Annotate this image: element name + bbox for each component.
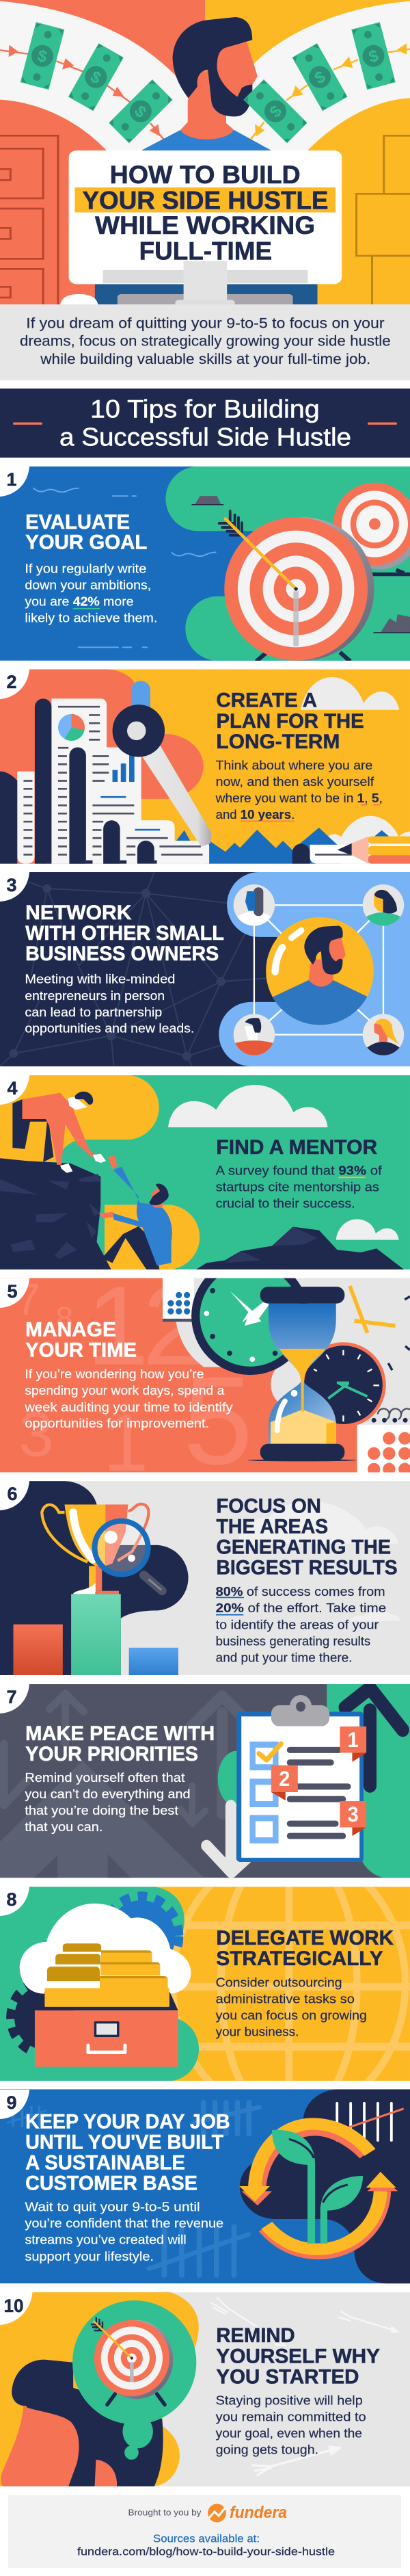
body text: to identify the areas of your xyxy=(216,1617,379,1631)
body text: startups cite mentorship as xyxy=(216,1179,379,1194)
number badge 10: 10 xyxy=(4,2296,23,2316)
body text: now, and then ask yourself xyxy=(216,774,374,789)
number badge 1 xyxy=(0,466,29,497)
green background xyxy=(0,1887,199,2081)
bill 5 xyxy=(292,43,347,111)
heading xyxy=(25,511,147,553)
number badge 3 xyxy=(0,872,29,902)
body text: If you’re wondering how you’re xyxy=(25,1367,204,1381)
heading: BUSINESS OWNERS xyxy=(25,943,219,965)
body text xyxy=(25,562,157,625)
waves and dashes xyxy=(33,488,216,647)
fundera wordmark: fundera xyxy=(230,2503,287,2522)
number badge 8: 8 xyxy=(6,1889,17,1910)
faint numbers: 1 xyxy=(103,1398,148,1488)
body text: Think about where you are xyxy=(216,758,372,772)
gears xyxy=(10,1896,179,2053)
right shelves xyxy=(357,135,410,306)
bill 4: $ xyxy=(266,102,286,122)
panel 10: remind yourself why you started xyxy=(0,2292,410,2486)
drawer xyxy=(35,2010,178,2067)
number badge 4 xyxy=(0,1075,29,1105)
section heading band: a Successful Side Hustle xyxy=(59,423,351,451)
climber top xyxy=(12,1092,106,1173)
heading: UNTIL YOU'VE BUILT xyxy=(25,2131,224,2153)
body text: can lead to partnership xyxy=(25,1005,162,1019)
body text: you are 42% more xyxy=(25,594,134,608)
heading: REMIND xyxy=(216,2324,295,2347)
faint clouds xyxy=(236,1501,400,1621)
number badge 4: 4 xyxy=(7,1078,18,1099)
calendar bottom xyxy=(357,1408,410,1475)
ribbon 2: 2 xyxy=(279,1767,290,1791)
number badge 2 xyxy=(0,669,29,699)
avatar top right xyxy=(363,884,404,928)
mountain xyxy=(196,1227,404,1270)
heading: STRATEGICALLY xyxy=(216,1947,383,1970)
faint numbers: 8 xyxy=(56,1300,73,1336)
body text: where you want to be in 1, 5, xyxy=(215,791,383,805)
body text xyxy=(216,1584,386,1664)
number badge 1: 1 xyxy=(6,469,17,490)
body text: 80% of success comes from xyxy=(216,1584,385,1599)
intro text panel: dreams, focus on strategically growing your side hustle xyxy=(20,334,391,350)
icon: fundera logo xyxy=(208,2503,226,2523)
ribbon 2 xyxy=(271,1765,298,1800)
number badge 5: 5 xyxy=(7,1281,18,1302)
number badge 9 xyxy=(0,2090,29,2119)
grey down arrow xyxy=(206,1806,259,1872)
panel 5: manage your time xyxy=(0,1278,410,1472)
body text: Remind yourself often that xyxy=(25,1770,185,1785)
heading: THE AREAS xyxy=(216,1516,328,1538)
heading: GENERATING THE xyxy=(216,1536,391,1558)
intro text panel: If you dream of quitting your 9-to-5 to focus on your xyxy=(26,315,385,331)
hourglass xyxy=(247,1287,357,1461)
heading xyxy=(216,1927,394,1970)
compass xyxy=(113,681,211,847)
connecting lines xyxy=(254,905,383,1035)
file folders xyxy=(44,1943,178,2010)
title: HOW TO BUILD xyxy=(110,161,301,189)
section heading band: 10 Tips for Building xyxy=(90,395,320,423)
heading: KEEP YOUR DAY JOB xyxy=(25,2110,230,2133)
bill 3 xyxy=(109,79,173,143)
number badge 9: 9 xyxy=(6,2092,17,2113)
coral arrows xyxy=(0,45,163,139)
heading xyxy=(25,2110,230,2194)
number badge 3: 3 xyxy=(6,875,17,895)
body text xyxy=(25,972,194,1036)
panel 1: evaluate your goal xyxy=(0,466,410,661)
person xyxy=(141,17,271,150)
heading xyxy=(25,902,224,965)
mountains xyxy=(176,830,190,841)
ribbon 3 xyxy=(340,1801,366,1836)
panel 2: create a plan xyxy=(0,669,410,873)
body text: business generating results xyxy=(216,1633,370,1648)
heading: EVALUATE xyxy=(25,511,130,534)
heading xyxy=(216,2324,380,2389)
heading: DELEGATE WORK xyxy=(216,1927,394,1949)
avatar bottom right xyxy=(363,1014,404,1059)
section heading band xyxy=(0,389,410,458)
circular arrows xyxy=(255,2124,384,2253)
number badge 7: 7 xyxy=(6,1687,17,1707)
number badge 5 xyxy=(0,1278,29,1308)
plant xyxy=(272,2130,363,2244)
document towers xyxy=(0,698,209,873)
body text: you’re confident that the revenue xyxy=(25,2217,223,2231)
small target xyxy=(91,2317,173,2405)
climber bottom xyxy=(99,1155,172,1270)
body text: entrepreneurs in person xyxy=(25,988,165,1003)
number badge 7 xyxy=(0,1684,29,1713)
dark clock xyxy=(301,1342,386,1428)
clouds xyxy=(301,677,399,710)
heading: PLAN FOR THE xyxy=(216,710,364,733)
tally marks xyxy=(337,2103,392,2140)
number badge 6 xyxy=(0,1481,29,1510)
navy up arrow xyxy=(345,1688,402,1786)
bill 1: $ xyxy=(36,47,49,67)
body text xyxy=(216,1163,383,1211)
body text: spending your work days, spend a xyxy=(25,1383,225,1397)
left filing cabinet xyxy=(0,135,58,308)
sources: Sources available at: xyxy=(153,2534,260,2545)
body text xyxy=(216,2393,366,2457)
body text: opportunities for improvement. xyxy=(25,1416,209,1430)
faint tally marks xyxy=(8,2102,259,2276)
bar chart xyxy=(113,755,135,782)
body text: support your lifestyle. xyxy=(25,2250,154,2264)
magnifying glass xyxy=(95,1521,162,1591)
heading: YOUR TIME xyxy=(25,1339,137,1362)
yellow arrows xyxy=(251,43,410,139)
body text: Meeting with like-minded xyxy=(25,972,175,986)
ribbon 1: 1 xyxy=(347,1729,359,1752)
body text: Staying positive will help xyxy=(216,2393,363,2408)
heading xyxy=(216,1495,398,1579)
right money band xyxy=(225,1,410,153)
heading: WITH OTHER SMALL xyxy=(25,922,224,945)
title: FULL-TIME xyxy=(139,237,272,265)
bill 5: $ xyxy=(312,67,329,88)
body text: you can’t do everything and xyxy=(25,1787,191,1801)
globe lines xyxy=(170,1844,410,2123)
thought bubble xyxy=(72,2300,196,2460)
number badge 10 xyxy=(0,2292,33,2325)
pencil and paper xyxy=(292,837,410,864)
green clock xyxy=(191,1257,309,1375)
faint numbers: 1 xyxy=(86,1263,149,1389)
title card xyxy=(69,150,342,284)
number badge 6: 6 xyxy=(7,1484,18,1504)
hero illustration xyxy=(0,0,410,309)
panel 7: make peace with your priorities xyxy=(0,1684,410,1878)
heading xyxy=(25,1722,215,1765)
main target xyxy=(224,517,374,661)
intro text panel: while building valuable skills at your full-time job. xyxy=(40,352,370,367)
heading: BIGGEST RESULTS xyxy=(216,1556,398,1579)
cliff xyxy=(0,1158,111,1270)
bill 1 xyxy=(20,22,64,90)
central portrait xyxy=(266,917,374,1027)
dollar bills xyxy=(20,22,396,143)
title xyxy=(75,161,336,265)
heading: CUSTOMER BASE xyxy=(25,2172,197,2194)
heading: MAKE PEACE WITH xyxy=(25,1722,215,1745)
title: WHILE WORKING xyxy=(95,211,315,239)
heading xyxy=(25,1318,137,1362)
heading xyxy=(216,689,364,753)
body text xyxy=(215,758,383,822)
heading: NETWORK xyxy=(25,902,131,924)
panel 8: delegate work strategically xyxy=(0,1844,410,2123)
body text: and put your time there. xyxy=(216,1650,352,1664)
heading: A SUSTAINABLE xyxy=(25,2151,185,2174)
body text: Consider outsourcing xyxy=(216,1975,342,1990)
body text: crucial to their success. xyxy=(216,1196,355,1211)
body text: opportunities and new leads. xyxy=(25,1021,194,1036)
body text: your business. xyxy=(216,2025,299,2038)
calendar top xyxy=(163,1278,194,1322)
body text: streams you’ve created will xyxy=(25,2233,187,2247)
panel 3: network xyxy=(0,872,410,1066)
bill 6: $ xyxy=(367,47,381,66)
body text xyxy=(216,1975,367,2038)
grey background xyxy=(173,1278,410,1472)
body text xyxy=(25,2200,223,2264)
heading: YOURSELF WHY xyxy=(216,2345,380,2368)
body text: likely to achieve them. xyxy=(25,611,157,625)
ribbon 3: 3 xyxy=(347,1803,359,1826)
small target xyxy=(333,483,410,576)
bill 3: $ xyxy=(131,102,150,122)
avatar top left xyxy=(234,884,275,928)
ribbon 1 xyxy=(340,1726,366,1762)
body text: administrative tasks so xyxy=(216,1992,355,2006)
title: YOUR SIDE HUSTLE xyxy=(82,186,328,215)
body text: 20% of the effort. Take time xyxy=(216,1601,386,1615)
heading: YOU STARTED xyxy=(216,2366,359,2389)
body text xyxy=(25,1770,191,1834)
body text: Wait to quit your 9-to-5 until xyxy=(25,2200,200,2214)
body text: down your ambitions, xyxy=(25,577,151,592)
clouds xyxy=(168,1085,327,1127)
faint arrows xyxy=(4,1694,262,1824)
body text: week auditing your time to identify xyxy=(24,1399,233,1414)
body text xyxy=(24,1367,233,1430)
yellow blob xyxy=(0,2292,199,2486)
head silhouette xyxy=(12,2360,163,2486)
faint numbers: 3 xyxy=(19,1400,54,1470)
panel 9: keep your day job xyxy=(0,2089,410,2283)
heading: MANAGE xyxy=(25,1318,116,1341)
brought to you by: Brought to you by xyxy=(128,2508,202,2517)
body text: that you’re doing the best xyxy=(25,1804,178,1817)
number badge 2: 2 xyxy=(6,672,17,692)
rocks xyxy=(195,496,221,504)
cloud xyxy=(20,1904,191,1994)
body text: you remain committed to xyxy=(216,2410,366,2424)
body text: If you regularly write xyxy=(25,562,146,576)
faint numbers xyxy=(16,1263,253,1490)
heading: YOUR PRIORITIES xyxy=(25,1743,198,1765)
trophy xyxy=(42,1504,148,1594)
pie chart xyxy=(58,714,85,741)
left money band xyxy=(0,1,189,153)
number badge 8 xyxy=(0,1887,29,1916)
yellow clock hands xyxy=(350,1286,396,1333)
heading: CREATE A xyxy=(216,689,317,712)
body text: that you can. xyxy=(25,1820,102,1834)
monitor stand and desk xyxy=(95,284,318,306)
faint numbers: 5 xyxy=(183,1350,253,1490)
body text: you can focus on growing xyxy=(216,2008,367,2023)
heading: LONG-TERM xyxy=(216,731,340,753)
faint arrows xyxy=(212,2298,395,2475)
heading: FOCUS ON xyxy=(216,1495,321,1517)
intro text panel xyxy=(0,304,410,380)
navy blob xyxy=(240,2089,410,2283)
body text: and 10 years. xyxy=(216,807,295,822)
bill 6 xyxy=(351,22,396,90)
avatar bottom left xyxy=(234,1014,275,1059)
faint numbers: 7 xyxy=(16,1274,40,1324)
bill 2: $ xyxy=(87,68,105,88)
body text: A survey found that 93% of xyxy=(216,1163,383,1177)
body text: your goal, even when the xyxy=(216,2426,362,2440)
network background xyxy=(0,872,275,1066)
faint numbers: 2 xyxy=(143,1263,205,1389)
green blob xyxy=(314,1684,410,1878)
panel 4: find a mentor xyxy=(0,1075,410,1270)
footer panel xyxy=(8,2495,401,2568)
bill 2 xyxy=(68,43,124,111)
heading: YOUR GOAL xyxy=(25,531,147,553)
clipboard xyxy=(236,1695,364,1862)
podium bars xyxy=(14,1625,63,1675)
arrow in target xyxy=(219,511,298,591)
body text: going gets tough. xyxy=(216,2443,318,2457)
document lines xyxy=(23,706,203,856)
source url: fundera.com/blog/how-to-build-your-side-hustle xyxy=(77,2547,335,2558)
heading: FIND A MENTOR xyxy=(216,1136,377,1159)
bill 4 xyxy=(243,79,308,143)
panel 6: focus on the areas xyxy=(0,1481,410,1675)
